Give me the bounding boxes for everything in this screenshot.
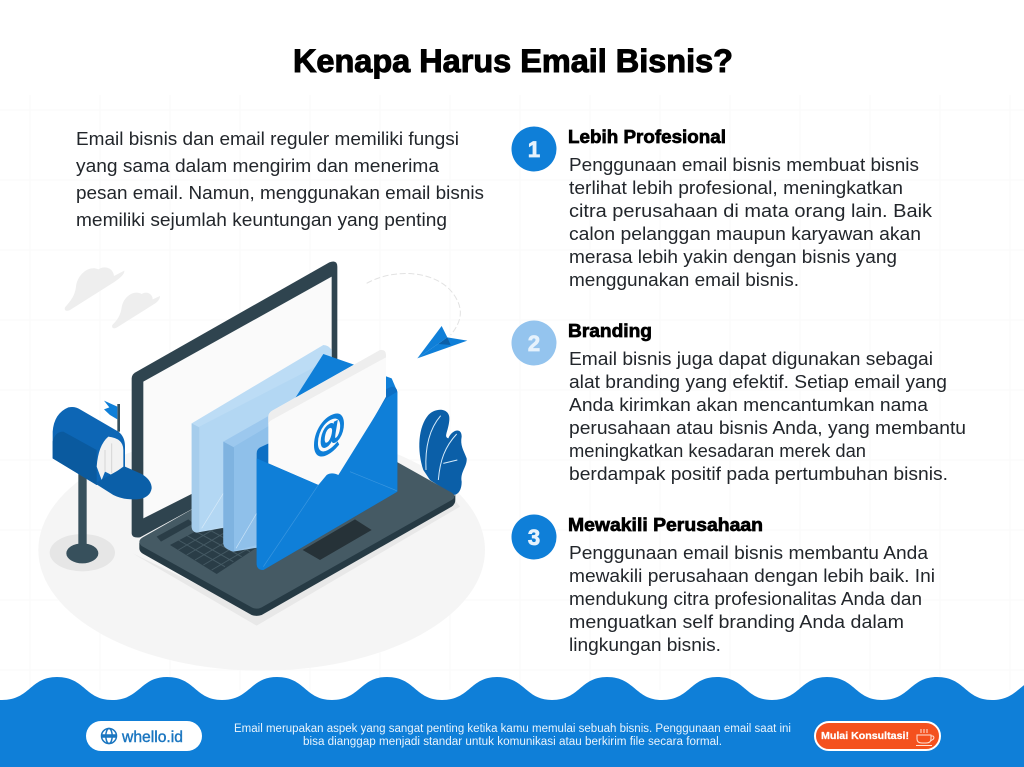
- body 2: Email bisnis juga dapat digunakan sebagai: [569, 348, 933, 369]
- envelope: front: [257, 350, 397, 570]
- intro text block: Email bisnis dan email reguler memiliki fungsi: [76, 128, 459, 149]
- body 3: menguatkan self branding Anda dalam: [569, 611, 904, 632]
- icon: paper plane: [417, 326, 467, 358]
- intro text block: [76, 128, 484, 230]
- laptop screen: [132, 261, 337, 537]
- item 2: Branding: [512, 320, 966, 484]
- item 3: Mewakili Perusahaan: [512, 514, 935, 655]
- footer band with wave: [0, 677, 1024, 767]
- body 3: lingkungan bisnis.: [569, 634, 721, 655]
- number badge 2: [512, 320, 556, 366]
- ground ellipse: [38, 429, 485, 671]
- body 2: [569, 348, 966, 484]
- keyboard: [170, 517, 263, 574]
- icon: coffee cup: [916, 729, 934, 746]
- icon: mailbox: [50, 401, 152, 571]
- icon: plant: [419, 410, 467, 495]
- intro text block: yang sama dalam mengirim dan menerima: [76, 155, 440, 176]
- footer text: [234, 723, 791, 748]
- footer text: Email merupakan aspek yang sangat penting ketika kamu memulai sebuah bisnis. Penggunaan email saat ini: [234, 723, 791, 735]
- letter with at-sign: [268, 350, 386, 485]
- intro text block: pesan email. Namun, menggunakan email bisnis: [76, 182, 484, 203]
- heading 3: Mewakili Perusahaan: [568, 514, 763, 535]
- icon: clouds: [65, 267, 160, 328]
- body 1: Penggunaan email bisnis membuat bisnis: [569, 154, 919, 175]
- heading 2: Branding: [568, 320, 652, 341]
- footer text: bisa dianggap menjadi standar untuk komunikasi atau berkirim file secara formal.: [303, 736, 722, 748]
- logo pill: [86, 721, 202, 751]
- consult button: [815, 722, 940, 750]
- number badge 1: [512, 126, 556, 172]
- number badge 3: 3: [528, 525, 540, 550]
- body 2: perusahaan atau bisnis Anda, yang membantu: [569, 417, 966, 438]
- body 3: mewakili perusahaan dengan lebih baik. Ini: [569, 565, 935, 586]
- body 3: Penggunaan email bisnis membantu Anda: [569, 542, 929, 563]
- body 3: [569, 542, 935, 655]
- icon: globe: [101, 728, 117, 744]
- number badge 3: [512, 514, 556, 560]
- number badge 1: 1: [528, 137, 540, 162]
- heading 1: Lebih Profesional: [568, 126, 726, 147]
- body 1: menggunakan email bisnis.: [569, 269, 799, 290]
- item 1: Lebih Profesional: [512, 126, 933, 290]
- trackpad: [303, 519, 372, 560]
- icon: dashed flight path: [367, 273, 460, 335]
- intro text block: memiliki sejumlah keuntungan yang penting: [76, 209, 447, 230]
- logo pill: whello.id: [121, 729, 183, 746]
- consult button: Mulai Konsultasi!: [821, 730, 909, 742]
- body 2: alat branding yang efektif. Setiap email yang: [569, 371, 947, 392]
- flag: [117, 404, 120, 432]
- body 1: merasa lebih yakin dengan bisnis yang: [569, 246, 897, 267]
- laptop base: [139, 429, 455, 616]
- envelope: back light: [192, 345, 332, 533]
- body 1: calon pelanggan maupun karyawan akan: [569, 223, 921, 244]
- illustration: laptop with email envelopes: [38, 261, 485, 671]
- number badge 2: 2: [528, 331, 540, 356]
- body 2: Anda kirimkan akan mencantumkan nama: [569, 394, 929, 415]
- body 3: mendukung citra profesionalitas Anda dan: [569, 588, 922, 609]
- body 1: terlihat lebih profesional, meningkatkan: [569, 177, 903, 198]
- body 2: berdampak positif pada pertumbuhan bisnis.: [569, 463, 948, 484]
- body 1: [569, 154, 933, 290]
- body 1: citra perusahaan di mata orang lain. Baik: [569, 200, 933, 221]
- body 2: meningkatkan kesadaran merek dan: [569, 440, 866, 461]
- title: Kenapa Harus Email Bisnis?: [293, 43, 733, 79]
- letter with at-sign: @: [313, 401, 345, 465]
- envelope: middle: [223, 387, 330, 552]
- laptop base shadow: [133, 498, 460, 626]
